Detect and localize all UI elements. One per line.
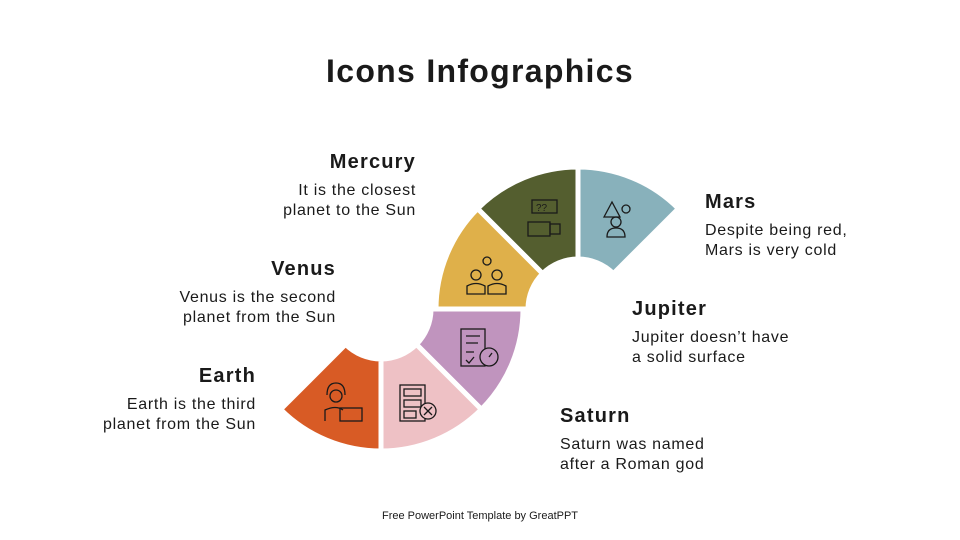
text: Venus: Venus is the second xyxy=(179,289,336,306)
footer: Free PowerPoint Template by GreatPPT xyxy=(382,510,578,522)
text: Saturn: Saturn xyxy=(560,405,631,427)
text: Mercury: Mercury xyxy=(330,151,416,173)
text: Mercury xyxy=(283,151,416,218)
icon: businesswoman briefcase xyxy=(325,383,362,421)
text: Jupiter: Jupiter xyxy=(632,298,707,320)
text: Mars xyxy=(705,191,847,258)
icon: warning person gear xyxy=(604,202,630,237)
text: Mars: Mars xyxy=(705,191,756,213)
segment: Venus yellow xyxy=(436,209,543,309)
text: Mercury: It is the closest xyxy=(298,182,416,199)
text: Saturn xyxy=(560,405,705,472)
text: Earth: planet from the Sun xyxy=(103,416,256,432)
text: Earth: Earth is the third xyxy=(127,396,256,413)
segment: Mercury olive xyxy=(478,167,578,274)
icon: chat feedback: ?? xyxy=(536,203,548,214)
segment: Earth orange xyxy=(281,344,381,451)
icon: chat feedback xyxy=(528,200,560,236)
text: Venus xyxy=(179,258,336,326)
icon: document stopwatch xyxy=(461,329,498,366)
text: Earth: Earth xyxy=(199,365,256,387)
text: Saturn: after a Roman god xyxy=(560,456,704,472)
segment: Saturn pink xyxy=(381,344,481,451)
text: Venus: planet from the Sun xyxy=(183,308,336,326)
icon: two people gear xyxy=(467,257,506,294)
text: Earth xyxy=(103,365,256,432)
text: Jupiter xyxy=(632,298,789,366)
text: Jupiter: Jupiter doesn’t have xyxy=(632,329,789,346)
text: Mars: Mars is very cold xyxy=(705,242,837,258)
text: Saturn: Saturn was named xyxy=(560,436,705,453)
text: Venus: Venus xyxy=(271,258,336,280)
segment: Mars teal xyxy=(578,167,678,274)
text: Mercury: planet to the Sun xyxy=(283,202,416,218)
segment: Jupiter purple xyxy=(416,309,523,409)
icon: list cancel xyxy=(400,385,436,421)
text: Jupiter: a solid surface xyxy=(632,348,746,366)
text: Mars: Despite being red, xyxy=(705,222,847,239)
title: Icons Infographics xyxy=(326,53,634,89)
